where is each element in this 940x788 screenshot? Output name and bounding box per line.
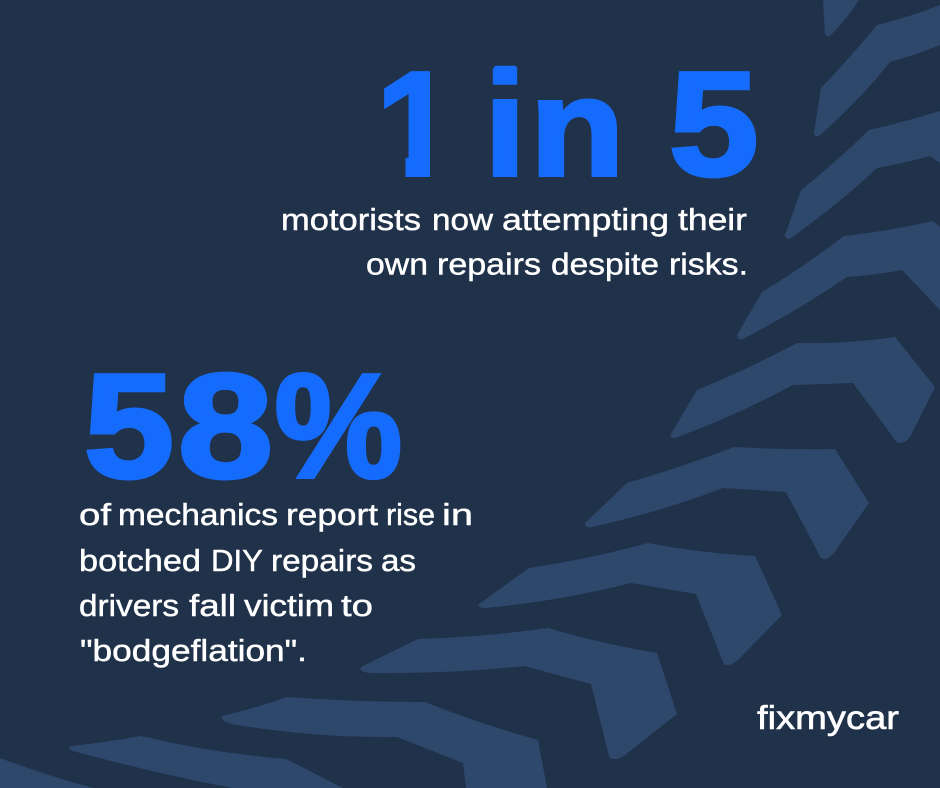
text block: mechanics: repairs: [271, 543, 373, 578]
text block: mechanics: as: [381, 543, 416, 578]
text block: mechanics: in: [442, 497, 473, 532]
text block: motorists: own: [366, 246, 428, 282]
statistic: 58%: %: [275, 344, 402, 509]
text block: mechanics: mechanics: [118, 497, 278, 532]
text block: mechanics: [79, 497, 473, 668]
text block: mechanics: of: [79, 497, 111, 532]
text block: motorists: risks.: [669, 246, 748, 282]
statistic: 58%: 8: [178, 344, 273, 509]
statistic: 1 in 5: i: [484, 42, 526, 207]
text block: motorists: now: [432, 202, 494, 237]
statistic: 1 in 5: 5: [669, 42, 758, 207]
text block: mechanics: botched: [79, 543, 201, 578]
statistic: 1 in 5: 1: [376, 42, 458, 207]
statistic: 58%: 5: [84, 344, 174, 509]
text block: motorists: despite: [551, 246, 659, 282]
text block: motorists: motorists: [281, 202, 421, 237]
text block: mechanics: DIY: [211, 543, 263, 578]
text block: motorists: repairs: [437, 246, 541, 282]
logo: fixmycar: fixmycar: [757, 699, 899, 736]
text block: motorists: attempting: [502, 202, 669, 237]
text block: mechanics: victim: [244, 588, 334, 623]
text block: mechanics: report: [286, 497, 378, 532]
statistic: 1 in 5: [384, 66, 756, 178]
text block: mechanics: "bodgeflation".: [80, 633, 307, 668]
text block: mechanics: fall: [189, 588, 236, 623]
text block: mechanics: drivers: [79, 588, 179, 623]
text block: mechanics: rise: [386, 497, 435, 532]
statistic: 58%: [84, 344, 402, 509]
statistic: 1 in 5: n: [530, 49, 624, 208]
text block: motorists: [281, 202, 748, 282]
text block: motorists: their: [678, 202, 747, 237]
text block: mechanics: to: [341, 588, 373, 623]
